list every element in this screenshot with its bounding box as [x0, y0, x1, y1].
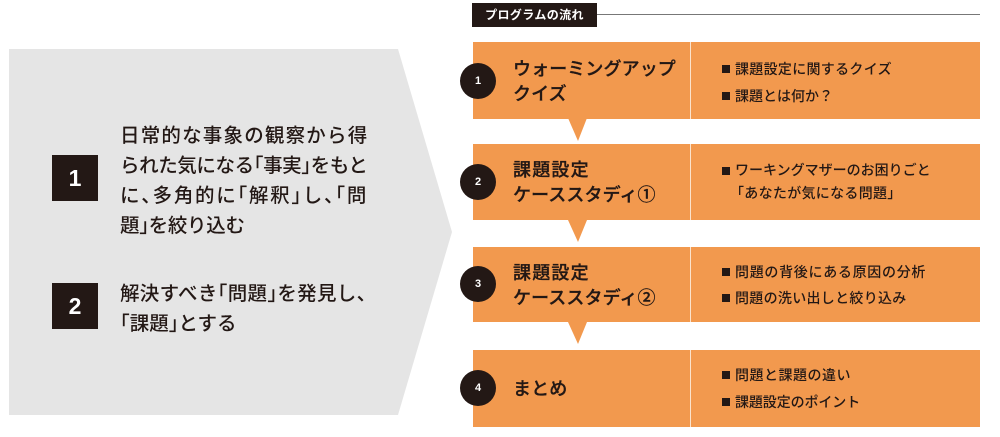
text block 2: 解決すべき「問題」を発見し、	[120, 282, 367, 304]
step 3 title	[513, 262, 656, 308]
step number 2	[460, 164, 496, 200]
step row 4	[472, 350, 980, 426]
step 4 item 1: 問題と課題の違い	[735, 367, 851, 383]
step number 3	[460, 266, 496, 302]
step 1 title: ウォーミングアップ	[513, 58, 676, 78]
step 1 item 2: 課題とは何か？	[735, 88, 833, 104]
step number 1: 1	[475, 75, 481, 87]
badge 2	[52, 283, 98, 329]
step 4 item 2: 課題設定のポイント	[735, 394, 860, 410]
step 2 item: ワーキングマザーのお困りごと	[735, 162, 931, 178]
bullet mark	[722, 268, 730, 276]
step row 2	[472, 144, 980, 220]
step number 4	[460, 370, 496, 406]
heading: program flow: プログラムの流れ	[485, 8, 584, 22]
text block 1: 題」を絞り込む	[120, 215, 245, 237]
connector arrow 1	[568, 119, 586, 141]
step 1 title: クイズ	[513, 84, 567, 104]
bullet mark	[722, 398, 730, 406]
step 3 title: 課題設定	[513, 262, 590, 282]
text block 1: 日常的な事象の観察から得	[120, 125, 368, 147]
text block 1: られた気になる「事実」をもと	[120, 155, 368, 177]
text block 2	[120, 282, 367, 334]
step 1 title	[513, 58, 676, 104]
text block 2: 「課題」とする	[120, 312, 236, 334]
step number 2: 2	[475, 176, 481, 188]
step row 3	[472, 247, 980, 322]
step number 4: 4	[475, 382, 481, 394]
text block 1: に、多角的に「解釈」し、「問	[120, 185, 368, 207]
badge 1	[52, 155, 98, 201]
step 3 title: ケーススタディ②	[513, 288, 656, 308]
step 2 item continuation: 「あなたが気になる問題」	[730, 185, 902, 201]
badge 2: 2	[69, 293, 81, 319]
step row 1	[472, 42, 980, 118]
bullet mark	[722, 166, 730, 174]
step 3 item 1: 問題の背後にある原因の分析	[735, 264, 926, 280]
bullet mark	[722, 294, 730, 302]
text block 1	[120, 125, 368, 237]
step 2 title	[513, 160, 656, 205]
bullet mark	[722, 64, 730, 72]
heading rule	[597, 14, 980, 15]
connector arrow 2	[568, 220, 587, 242]
heading: program flow	[472, 3, 597, 27]
step number 1	[460, 63, 496, 99]
step 2 title: 課題設定	[513, 160, 590, 180]
step 1 item 1: 課題設定に関するクイズ	[735, 61, 892, 77]
step number 3: 3	[475, 278, 481, 290]
connector arrow 3	[568, 322, 587, 344]
step 4 title: まとめ	[513, 378, 567, 398]
bullet mark	[722, 92, 730, 100]
step 3 item 2: 問題の洗い出しと絞り込み	[735, 290, 907, 306]
bullet mark	[722, 371, 730, 379]
badge 1: 1	[69, 165, 81, 191]
step 2 title: ケーススタディ①	[513, 185, 656, 205]
